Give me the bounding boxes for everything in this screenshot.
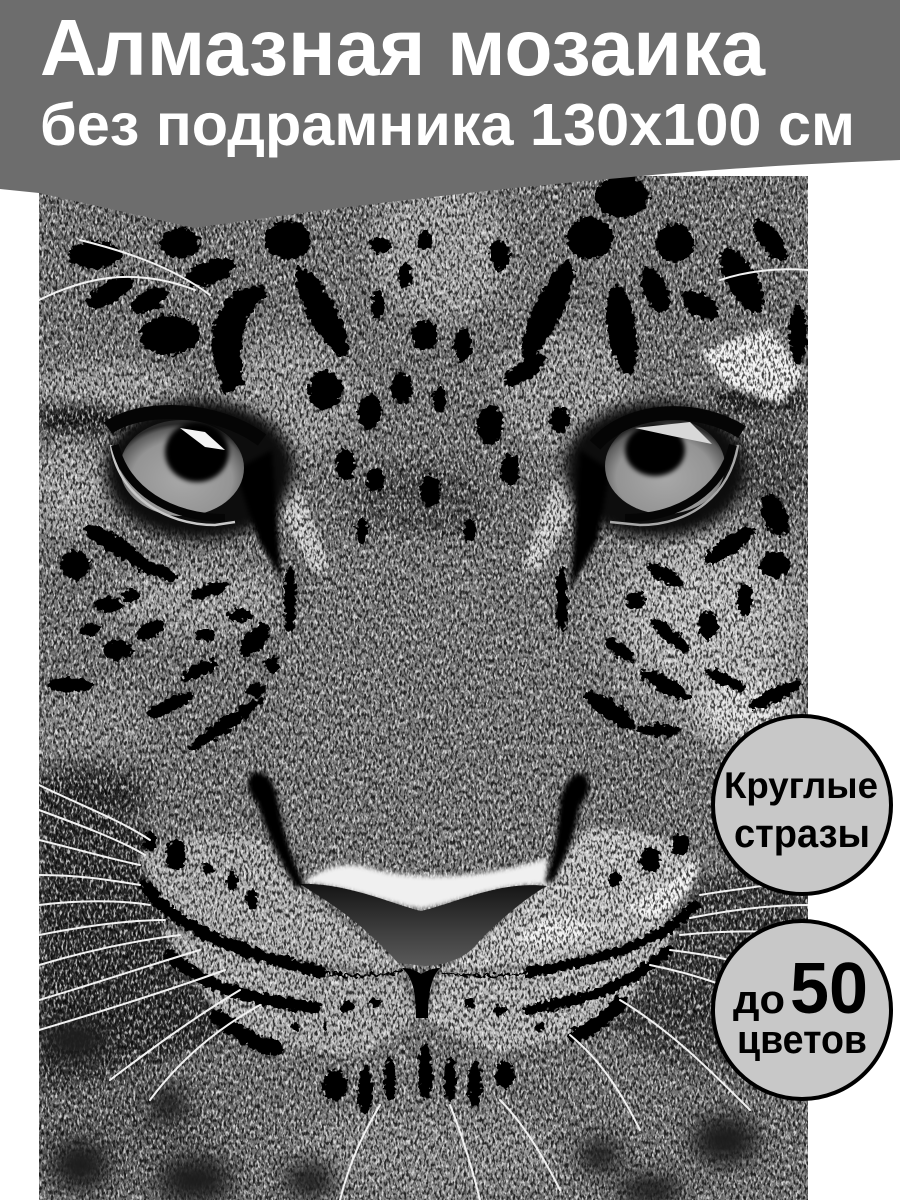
- subtitle: без подрамника 130х100 см: [40, 92, 855, 158]
- eye: left: [105, 400, 295, 580]
- nose white band: [302, 858, 547, 909]
- blurred spots in lower background: [40, 1018, 759, 1200]
- title: Алмазная мозаика: [40, 3, 765, 92]
- fur texture: [39, 176, 808, 1200]
- muzzle pads: [138, 828, 700, 1120]
- nose: [300, 884, 547, 966]
- nose bridge: [368, 536, 472, 560]
- badge: round rhinestones: [713, 716, 891, 894]
- leopard spots: [46, 176, 807, 1114]
- dark lip bands: [145, 885, 695, 1048]
- badge: round rhinestones: Круглые: [724, 765, 878, 806]
- whiskers: [39, 240, 808, 1200]
- fur tonal regions: [10, 180, 820, 1200]
- white cheek patch: [700, 328, 805, 405]
- philtrum and mouth: [402, 968, 440, 1018]
- header banner: [0, 0, 900, 228]
- badge: up to 50 colours: до: [733, 978, 785, 1022]
- white stripes beside nose bridge: [280, 466, 574, 576]
- badge: up to 50 colours: [713, 921, 891, 1099]
- badge: up to 50 colours: 50: [790, 949, 868, 1029]
- badge: round rhinestones: стразы: [734, 812, 870, 856]
- leopard portrait photo: [10, 176, 820, 1200]
- badge: up to 50 colours: цветов: [737, 1018, 867, 1062]
- eye: right: [563, 402, 747, 590]
- nostril shadows: [248, 772, 589, 888]
